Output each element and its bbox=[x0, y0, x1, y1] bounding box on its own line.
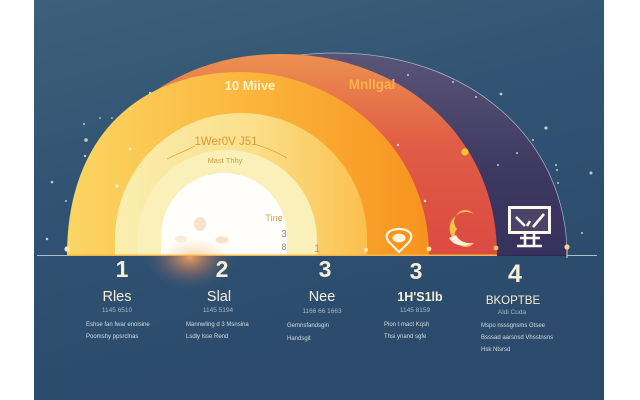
step body 4: Pion t mact Kqsh bbox=[384, 322, 429, 328]
column 3 bbox=[287, 256, 342, 342]
heading: red band label: Mnllgal bbox=[349, 77, 395, 92]
small core label: Tine bbox=[265, 213, 283, 223]
step subtitle 3: 1166 66 1663 bbox=[302, 308, 342, 315]
inner heading with curved rule: Mast Thhy bbox=[208, 156, 243, 165]
step body 2 bbox=[186, 322, 249, 340]
column 2 bbox=[186, 256, 249, 340]
arc: red band bbox=[120, 54, 497, 255]
step subtitle 4: 1145 8159 bbox=[400, 307, 431, 314]
arc: light yellow band bbox=[115, 113, 367, 255]
small core label: 3 bbox=[281, 229, 287, 240]
step subtitle 1: 1145 6510 bbox=[102, 307, 133, 314]
core warm glow bbox=[166, 241, 224, 254]
baseline glow bbox=[150, 256, 230, 285]
inner heading with curved rule: 1Wer0V J51 bbox=[194, 136, 258, 148]
step body 5 bbox=[481, 323, 553, 353]
step title 2: Slal bbox=[207, 289, 231, 305]
baseline rule with markers bbox=[37, 244, 597, 258]
scattered specks bbox=[46, 74, 592, 240]
step title 1: Rles bbox=[102, 289, 132, 305]
step body 5: Hsk Ntsrsd bbox=[481, 347, 510, 353]
step body 3: Handsgit bbox=[287, 336, 311, 342]
step body 2: Mannwling d 3 Msnsina bbox=[186, 322, 249, 328]
step body 4 bbox=[384, 322, 429, 340]
step title 3: Nee bbox=[309, 289, 335, 305]
arc: orange band bbox=[67, 72, 429, 255]
icon: crescent bbox=[449, 210, 474, 247]
step body 3 bbox=[287, 323, 329, 342]
column 4 bbox=[384, 258, 443, 340]
step number 3 (second): 3 bbox=[410, 258, 422, 284]
icon: monitor bbox=[510, 208, 550, 246]
step body 3: Gemnsfandsgin bbox=[287, 323, 329, 329]
step body 1: Eshse fan fwar enoisine bbox=[86, 322, 150, 328]
icon: location pin bbox=[387, 229, 411, 252]
step number 3: 3 bbox=[319, 256, 331, 282]
step body 2: Lsdly lsse Rend bbox=[186, 334, 228, 340]
core petals bbox=[175, 217, 228, 244]
inner heading with curved rule bbox=[167, 136, 287, 165]
arc: pale band bbox=[137, 150, 317, 255]
step body 5: Mspo nsssgnsms Gtsee bbox=[481, 323, 546, 329]
step body 1 bbox=[86, 322, 150, 340]
step number 4: 4 bbox=[508, 260, 522, 288]
step subtitle 5: Aldi Cuda bbox=[498, 309, 526, 316]
arc: navy outer band bbox=[103, 53, 567, 255]
small core label: 1 bbox=[314, 243, 320, 255]
small core label bbox=[265, 213, 320, 255]
step title 4: 1H'S1lb bbox=[397, 290, 443, 304]
step subtitle 2: 1145 5194 bbox=[203, 307, 234, 314]
step body 5: Bsssad aarsnsd Vhsstnsns bbox=[481, 335, 553, 341]
small core label: 8 bbox=[281, 242, 287, 252]
concentric arcs diagram bbox=[67, 53, 567, 271]
step title 5: BKOPTBE bbox=[486, 295, 540, 307]
arc: white core bbox=[161, 173, 287, 255]
accent dot bbox=[461, 148, 469, 156]
step number 1: 1 bbox=[116, 256, 129, 282]
column 1 bbox=[86, 256, 150, 340]
step body 4: Thsi ynand sgfe bbox=[384, 334, 427, 340]
heading: outer orange label: 10 Miive bbox=[225, 78, 275, 93]
column 5 bbox=[481, 260, 553, 353]
step number 2: 2 bbox=[216, 256, 228, 282]
step body 1: Poomshy ppsrclnas bbox=[86, 334, 138, 340]
